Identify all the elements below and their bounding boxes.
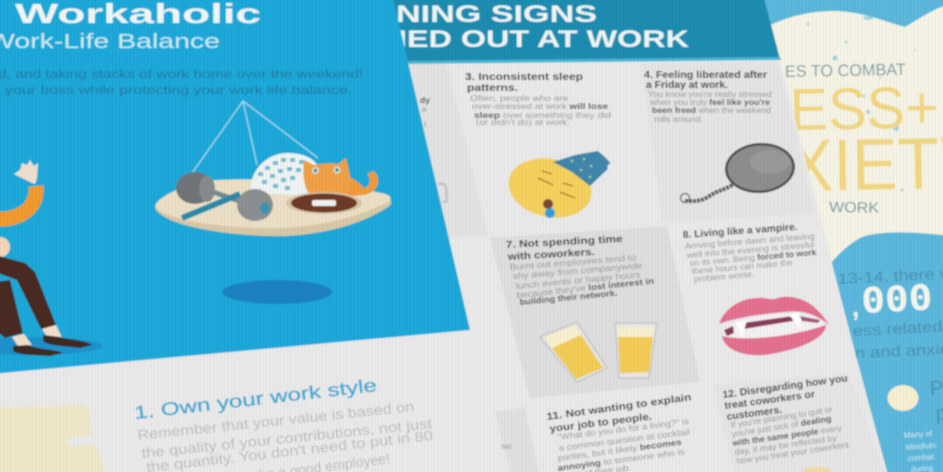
clipped card 2 text: t	[424, 119, 427, 129]
intro text line 2: your boss while protecting your work life balance.	[5, 83, 352, 97]
panel: stress and anxiety infographic	[760, 0, 943, 472]
card 11: your job to people.	[549, 411, 653, 435]
tip text	[904, 429, 936, 472]
section body text: the quality of your contributions, not just	[141, 415, 433, 461]
section heading: 1. Own your work style	[133, 375, 378, 423]
card 4: You know you're really stressed	[648, 89, 772, 99]
card 8: Arriving before dawn and leaving	[684, 231, 815, 251]
card 7: with coworkers.	[506, 247, 595, 263]
card 3: over-stressed at work will lose	[472, 101, 608, 111]
header band	[380, 0, 780, 63]
big number: 000	[860, 278, 933, 322]
tip text: Many of	[904, 429, 933, 440]
icon: cream illustration	[0, 405, 108, 472]
section body text: Remember that your value is based on	[137, 398, 415, 443]
card 4: been freed when the weekend	[652, 105, 771, 115]
illustration: person	[0, 160, 102, 356]
dumbbell	[213, 192, 242, 202]
heading line: at work: WORK	[829, 199, 879, 217]
card 12: treat coworkers or	[724, 389, 816, 412]
card 7: lunch events or happy hours	[515, 269, 641, 291]
panel: warning signs infographic	[380, 0, 890, 472]
card 7	[506, 234, 657, 382]
tip text: Mindfuln	[906, 441, 936, 452]
mouth interior	[722, 314, 824, 341]
cat	[340, 171, 378, 197]
icon: ball and chain	[680, 141, 797, 202]
statistic text: 13-14, there w	[837, 265, 943, 288]
card 10 fragments: ser	[501, 442, 512, 451]
clipped card 2 text: e	[422, 104, 427, 114]
card 7: building their network.	[519, 288, 618, 307]
card 7: because they've lost interest in	[516, 276, 654, 300]
card 11: "What do you do for a living?" is	[557, 416, 689, 442]
numbered circle	[888, 385, 918, 411]
card 3: Often, people who are	[470, 93, 568, 103]
card 7 background	[490, 226, 700, 398]
net dome	[250, 153, 320, 196]
icon: beer glasses	[540, 322, 657, 382]
header text line 2: IED OUT AT WORK	[398, 26, 690, 53]
shadow under scale	[222, 280, 332, 304]
yellow heading: stress: ESS+	[789, 74, 939, 143]
header text line 1: NING SIGNS	[396, 1, 597, 28]
card 8: 8. Living like a vampire.	[682, 222, 798, 241]
card 11: parties, but it likely becomes	[557, 437, 682, 463]
card 8	[682, 222, 829, 355]
card 12: customers.	[726, 405, 783, 423]
card 12	[722, 373, 852, 472]
card 12: how you treat your coworkers.	[736, 439, 852, 466]
card 4: rolls around.	[654, 114, 703, 124]
card 12: If you're planning to quit or	[730, 404, 833, 430]
tip text: combat	[908, 452, 935, 463]
section: own your work style	[0, 375, 434, 472]
card 4: 4. Feeling liberated after	[644, 70, 767, 81]
lower lip	[722, 325, 826, 355]
cream cloud background	[760, 4, 943, 262]
card 8: problem worse.	[693, 269, 755, 284]
card 3: (or didn't do) at work.	[476, 117, 570, 127]
icon: sleeping emoji	[503, 151, 614, 225]
card 7: 7. Not spending time	[506, 234, 624, 251]
card 11: a common question at cocktail	[558, 427, 690, 453]
illustration: floating balance scale	[155, 101, 391, 236]
panel: workaholic infographic	[0, 0, 470, 375]
card 4: when you truly feel like you're	[649, 97, 770, 107]
card 12: you're just sick of dealing	[731, 413, 832, 439]
clipped card 2 icon	[438, 184, 447, 202]
icon: partial card 12 illustration	[802, 467, 832, 472]
card 10 background	[495, 407, 540, 472]
clipped card 2 text: dy	[420, 95, 430, 105]
card 4	[644, 70, 797, 202]
header underline	[400, 57, 781, 64]
card 7: shy away from companywide	[512, 260, 643, 281]
card 8: these hours can make the	[691, 257, 793, 276]
section body text	[137, 398, 434, 472]
big number: ,	[852, 292, 859, 322]
heading line: ways to combat: ES TO COMBAT	[785, 61, 906, 81]
card 7: Burnt out employees tend to	[509, 252, 637, 272]
card 2 background	[405, 63, 488, 238]
card 11	[546, 392, 692, 472]
upper lip	[719, 297, 829, 325]
card 12: with the same people every	[731, 423, 843, 448]
card 3: sleep over something they did	[474, 110, 611, 120]
statistic text line 3: n and anxie	[854, 341, 943, 362]
card 12: day, it may be reflected by	[734, 433, 838, 457]
scale plate	[155, 181, 391, 236]
football	[286, 192, 362, 214]
clipped card 2 text	[420, 95, 430, 129]
card 8: on its own. Being forced to work	[689, 247, 817, 268]
fangs	[735, 320, 747, 338]
card 3: patterns.	[467, 83, 518, 94]
card 12: 12. Disregarding how you	[722, 373, 848, 401]
card 3	[465, 72, 614, 225]
paint speckles	[806, 16, 916, 192]
card 4: a Friday at work.	[646, 80, 728, 91]
card 11: 11. Not wanting to explain	[546, 392, 692, 423]
card 8: well into the evening is stressful	[685, 239, 815, 260]
card 3: 3. Inconsistent sleep	[465, 72, 583, 83]
intro text line 1: d, and taking stacks of work home over the weekend!	[0, 67, 363, 81]
card 4 background	[641, 62, 815, 222]
card 12 background	[713, 373, 888, 472]
icon: vampire lips	[719, 297, 829, 355]
statistic text line 2: ess related t	[852, 318, 943, 340]
